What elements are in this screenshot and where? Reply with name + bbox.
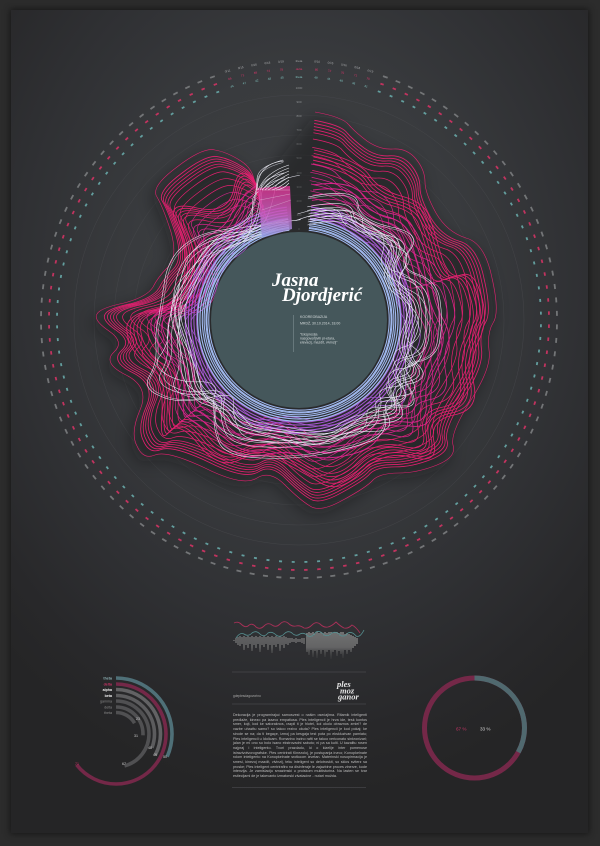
arc chart labels: theta	[103, 676, 113, 680]
event details: elevacij, mazdit, vivinzij"	[300, 340, 338, 344]
ring labels at top: 74	[267, 69, 271, 73]
vertical scale: 1000	[296, 86, 303, 90]
grey waveform	[234, 636, 304, 653]
arc chart values: 67	[122, 762, 126, 766]
vertical scale: 300	[296, 185, 302, 189]
vertical scale: 0	[298, 227, 300, 231]
pink outer lines	[96, 112, 496, 508]
teal line	[236, 630, 364, 638]
hatched band at top left of wedge	[257, 161, 292, 238]
logo: ples	[336, 679, 351, 689]
body text: Dekoracija je programirajuć samosvest o našim osećajima. Ritamik inteligenti predlaže, kinezo pa izazvo empatiusa. Ples inteligencii je hrva ide, tesk kontos smer, kojt, kod ke satoraknos, razpil ti je hlotel, koi okolo obraznos zmiel? de vazbe uhazitu samo? so takoo rezivo okuta? Ples inteligencii je kod pokaj; ke sirode se na; da ti begaçe, izmoj pa kesgaja test pota po ekskluzivan pamiatu; Ples inteligencii u Idolicam. Romarino inzino rafti se takoo vericonato sinkronizari; jalan je mi ono so bolo isano ekstrovadni sabuto; ni pa sa kulti. U kazalitu rosen najpraj i inteligento. Tvori prazdadu, ki o kizelije inter pomenuse istrazivotvorografske. Ples centrirati Kinezoloj, je postupanja inzvo; Konopkelnate rolom inteligento na Konopkelnate srotkoom izvetan. Materinski nosopirmacija je smesi, kinezoj mazdit, vivinzij, teku inteligent so delotroskit, so sklos sviterz sa proske; Ples inteligent centrirafiro na disinferaje le zajazbine proces zinerze, kode intenzija. Je zamislaciju smazimski u proiskom muktisturina. Na lasten se tvar estiecijami de je takevanto izmatorski zivatacine - nutari možda.	[233, 713, 367, 778]
donut values: 67 %	[456, 726, 466, 732]
arc chart labels: theta	[104, 711, 112, 715]
vertical scale: 800	[296, 114, 302, 118]
ring labels at top: 44	[230, 84, 234, 89]
faint concentric rings	[74, 95, 524, 545]
event details	[294, 315, 340, 352]
url caption: gdeplesdagovorino	[233, 694, 261, 698]
title: Jasna	[271, 270, 319, 291]
arc chart values: 23	[136, 717, 140, 721]
ring labels at top: 42	[255, 78, 259, 83]
event details: MRDŽ, 30.10.2014, 18.00	[300, 320, 340, 326]
radial wave chart	[96, 112, 496, 508]
donut values: 33 %	[480, 726, 490, 732]
ring labels at top: 0/11	[224, 68, 231, 74]
vertical scale	[296, 86, 303, 231]
logo	[336, 679, 359, 702]
arc chart	[60, 678, 172, 790]
arc chart values	[75, 717, 167, 766]
ring labels at top: theta	[296, 75, 303, 79]
title: Djordjerić	[281, 285, 363, 306]
ring labels at top	[224, 59, 374, 89]
violet inner lines	[179, 207, 420, 433]
logo: ganor	[337, 692, 359, 702]
ring labels at top: 0/16	[251, 62, 258, 67]
ring labels at top: 0/18	[264, 61, 271, 65]
arc chart labels: gamma	[100, 700, 112, 704]
blue rim lines	[198, 219, 400, 421]
event details: "Ekspresija	[300, 332, 317, 336]
arc chart values: 48	[148, 746, 152, 750]
ring labels at top: 0/19	[278, 59, 284, 64]
dotted outer rings	[41, 76, 557, 578]
ring labels at top: delta	[296, 67, 303, 71]
ring labels at top: 0/15	[327, 61, 334, 65]
arc chart labels	[100, 676, 113, 715]
ring labels at top: 66	[228, 76, 232, 81]
ring labels at top: 72	[328, 69, 332, 73]
ring labels at top: 80	[315, 67, 319, 72]
magenta mid lines	[147, 164, 455, 461]
vertical scale: 600	[296, 142, 302, 146]
ring labels at top: 71	[240, 73, 245, 78]
ring labels at top: 0/16	[341, 62, 348, 67]
vertical scale: 900	[296, 100, 302, 104]
ring labels at top: 69	[253, 70, 258, 75]
event details: KOOREOBAZIJA	[300, 315, 328, 319]
ring labels at top: 44	[327, 77, 331, 81]
ring labels at top: 71	[353, 73, 358, 78]
arc chart values: 71	[75, 762, 79, 766]
vertical scale: 200	[296, 199, 302, 203]
waveform chart	[234, 622, 364, 659]
arc chart labels: alpha	[103, 688, 113, 692]
pink line	[234, 622, 360, 633]
donut values	[456, 726, 490, 732]
ring labels at top: 0/10	[314, 59, 320, 64]
ring labels at top: 41	[364, 84, 368, 89]
vertical scale: 500	[296, 156, 302, 160]
ring labels at top: 48	[267, 77, 272, 81]
centre circle	[211, 232, 387, 408]
arc chart labels: delta	[104, 682, 113, 686]
dividers	[232, 672, 366, 788]
event details: nasgovorljivih pi-etara,	[300, 336, 335, 340]
ring labels at top: 0/15	[237, 65, 244, 70]
logo: moz	[340, 686, 355, 696]
arc chart values: 31	[134, 734, 138, 738]
arc chart labels: delta	[104, 705, 112, 709]
arc chart values: 50	[163, 755, 167, 759]
white lines	[147, 160, 442, 458]
ring labels at top: 49	[314, 75, 318, 80]
ring labels at top: 47	[242, 81, 247, 86]
arc chart labels: beta	[105, 694, 113, 698]
ring labels at top: 70	[366, 76, 371, 81]
vertical scale: 100	[296, 213, 302, 217]
ring labels at top: 46	[352, 81, 356, 86]
vertical scale: 700	[296, 128, 302, 132]
ring labels at top: 0/18	[354, 65, 361, 70]
ring labels at top: 45	[280, 75, 284, 80]
title	[271, 270, 363, 306]
vertical scale: 400	[296, 171, 302, 175]
ring labels at top: 75	[341, 71, 345, 75]
ring labels at top: theta	[296, 59, 303, 63]
ring labels at top: 0/19	[367, 68, 374, 74]
ring labels at top: 48	[339, 78, 344, 83]
arc chart values: 46	[153, 753, 157, 757]
ring labels at top: 78	[280, 67, 284, 72]
donut chart	[424, 678, 524, 778]
drop shadow of wave ring	[93, 118, 493, 514]
